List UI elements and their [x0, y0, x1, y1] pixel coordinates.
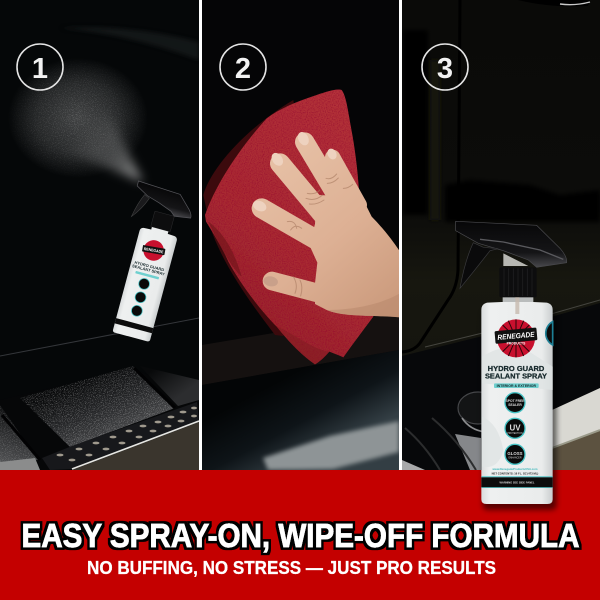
step trim and underside [72, 422, 199, 470]
running board specks [20, 366, 175, 447]
fingernails [251, 130, 338, 213]
badge: UV protection: UV [509, 424, 521, 433]
badge: UV protection: PROTECTION [507, 433, 523, 435]
lower body dark [402, 303, 600, 416]
towel fold shading [208, 222, 242, 277]
badge: spot free sealer: SEALER [508, 403, 522, 407]
door handle glint [518, 0, 590, 6]
lower left sill [402, 460, 425, 470]
side badge [546, 322, 553, 345]
teal pill [135, 271, 159, 280]
door seam [402, 0, 460, 352]
subheading: NO BUFFING, NO STRESS — JUST PRO RESULTS [87, 558, 496, 578]
step number 2 [220, 44, 266, 90]
studded step strip [42, 402, 199, 470]
reflection left [403, 30, 428, 215]
interior and exterior pill: INTERIOR & EXTERIOR [497, 384, 537, 388]
bottle body [481, 302, 553, 504]
warning band [115, 318, 153, 333]
right sill section [152, 371, 199, 406]
badge: gloss [505, 444, 525, 464]
panel 1: spraying the door [0, 0, 199, 470]
step number 1: 1 [32, 53, 48, 85]
product name [485, 364, 547, 380]
thumb nail [264, 276, 278, 286]
product name: SEALANT SPRAY [132, 263, 166, 277]
panel 3: finished glossy door [402, 0, 600, 470]
product name: SEALANT SPRAY [485, 371, 547, 380]
badge: gloss: GLOSS [507, 451, 523, 456]
step number 3 [422, 44, 468, 90]
white reflection on running board [552, 388, 600, 448]
step number 3: 3 [437, 53, 453, 85]
badge: UV protection [505, 418, 525, 438]
renegade logo: PRODUCTS [507, 341, 526, 345]
website and net contents: NET CONTENTS: 16 FL. OZ (473 ML) [492, 471, 538, 475]
left sill section [0, 405, 38, 464]
bottom red banner [0, 470, 600, 600]
renegade logo: RENEGADE [497, 330, 536, 342]
reflected treeline [445, 180, 600, 222]
website and net contents: www.RenegadeProductsUSA.com [492, 467, 538, 471]
palm [309, 195, 400, 317]
fuel cap [458, 391, 482, 432]
badge: spot free sealer [505, 393, 525, 413]
towel back fold [203, 100, 300, 336]
door highlight at top [83, 28, 198, 58]
door crease line [0, 318, 199, 356]
badge: gloss: ENHANCER [508, 457, 522, 460]
logo [140, 238, 167, 263]
lower sill [202, 350, 399, 470]
reflected highlight strip [263, 421, 399, 470]
lower door edge [425, 300, 600, 347]
sill ridges [2, 368, 175, 460]
trigger sprayer [456, 221, 567, 297]
large product bottle [456, 221, 567, 510]
dip tube [515, 297, 519, 314]
knuckle creases and shading [287, 174, 353, 296]
renegade logo [494, 319, 537, 357]
panel 2: wiping with the towel [202, 0, 400, 470]
badges [130, 277, 151, 317]
running board centre [20, 366, 175, 447]
step number 1 [17, 44, 63, 90]
trigger sprayer [128, 181, 196, 236]
warning band [481, 476, 553, 488]
logo: RENEGADE [144, 246, 164, 254]
towel and hand [203, 90, 400, 364]
white divider lines [199, 0, 402, 470]
clear neck [503, 297, 533, 304]
product name: HYDRO GUARD [134, 260, 165, 272]
fingers [262, 142, 359, 297]
warning band: WARNING SEE SIDE PANEL [499, 481, 535, 485]
spray mist [8, 58, 148, 182]
small spraying bottle [99, 181, 196, 344]
upper door lower band [202, 312, 399, 385]
bottle body [112, 224, 178, 342]
towel [205, 90, 373, 364]
running board base [0, 368, 199, 470]
product name: HYDRO GUARD [488, 364, 544, 373]
bottle shadow [483, 310, 557, 510]
hand [251, 130, 400, 317]
website and net contents [492, 467, 538, 475]
step number 2: 2 [235, 53, 251, 85]
badge: spot free sealer: SPOT FREE [506, 399, 525, 403]
faded car artwork on label [482, 347, 553, 467]
